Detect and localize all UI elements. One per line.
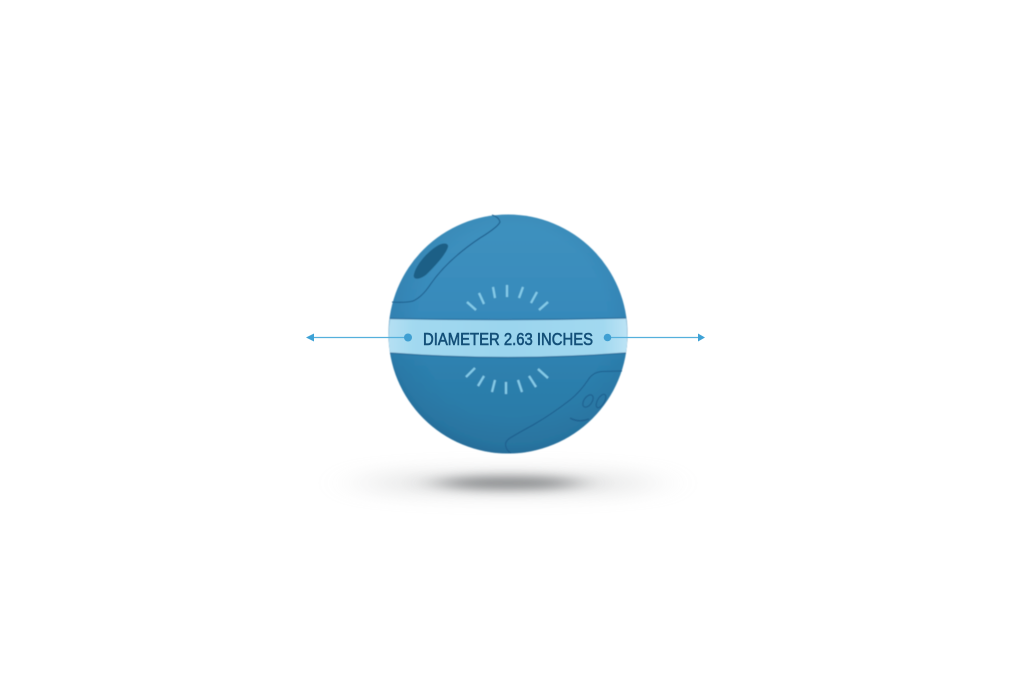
right arrow bbox=[604, 334, 705, 342]
diameter label: DIAMETER 2.63 INCHES bbox=[423, 329, 593, 349]
sphere bbox=[388, 214, 628, 454]
diameter band bbox=[389, 318, 627, 358]
tick marks: upper arc bbox=[467, 285, 548, 310]
seam: upper panel bbox=[392, 215, 500, 302]
tick marks: lower arc bbox=[466, 368, 548, 394]
ground shadow bbox=[358, 472, 658, 494]
left arrow bbox=[306, 334, 412, 342]
seam: lower panel with face details bbox=[506, 371, 622, 453]
icon: slot opening bbox=[414, 243, 448, 279]
